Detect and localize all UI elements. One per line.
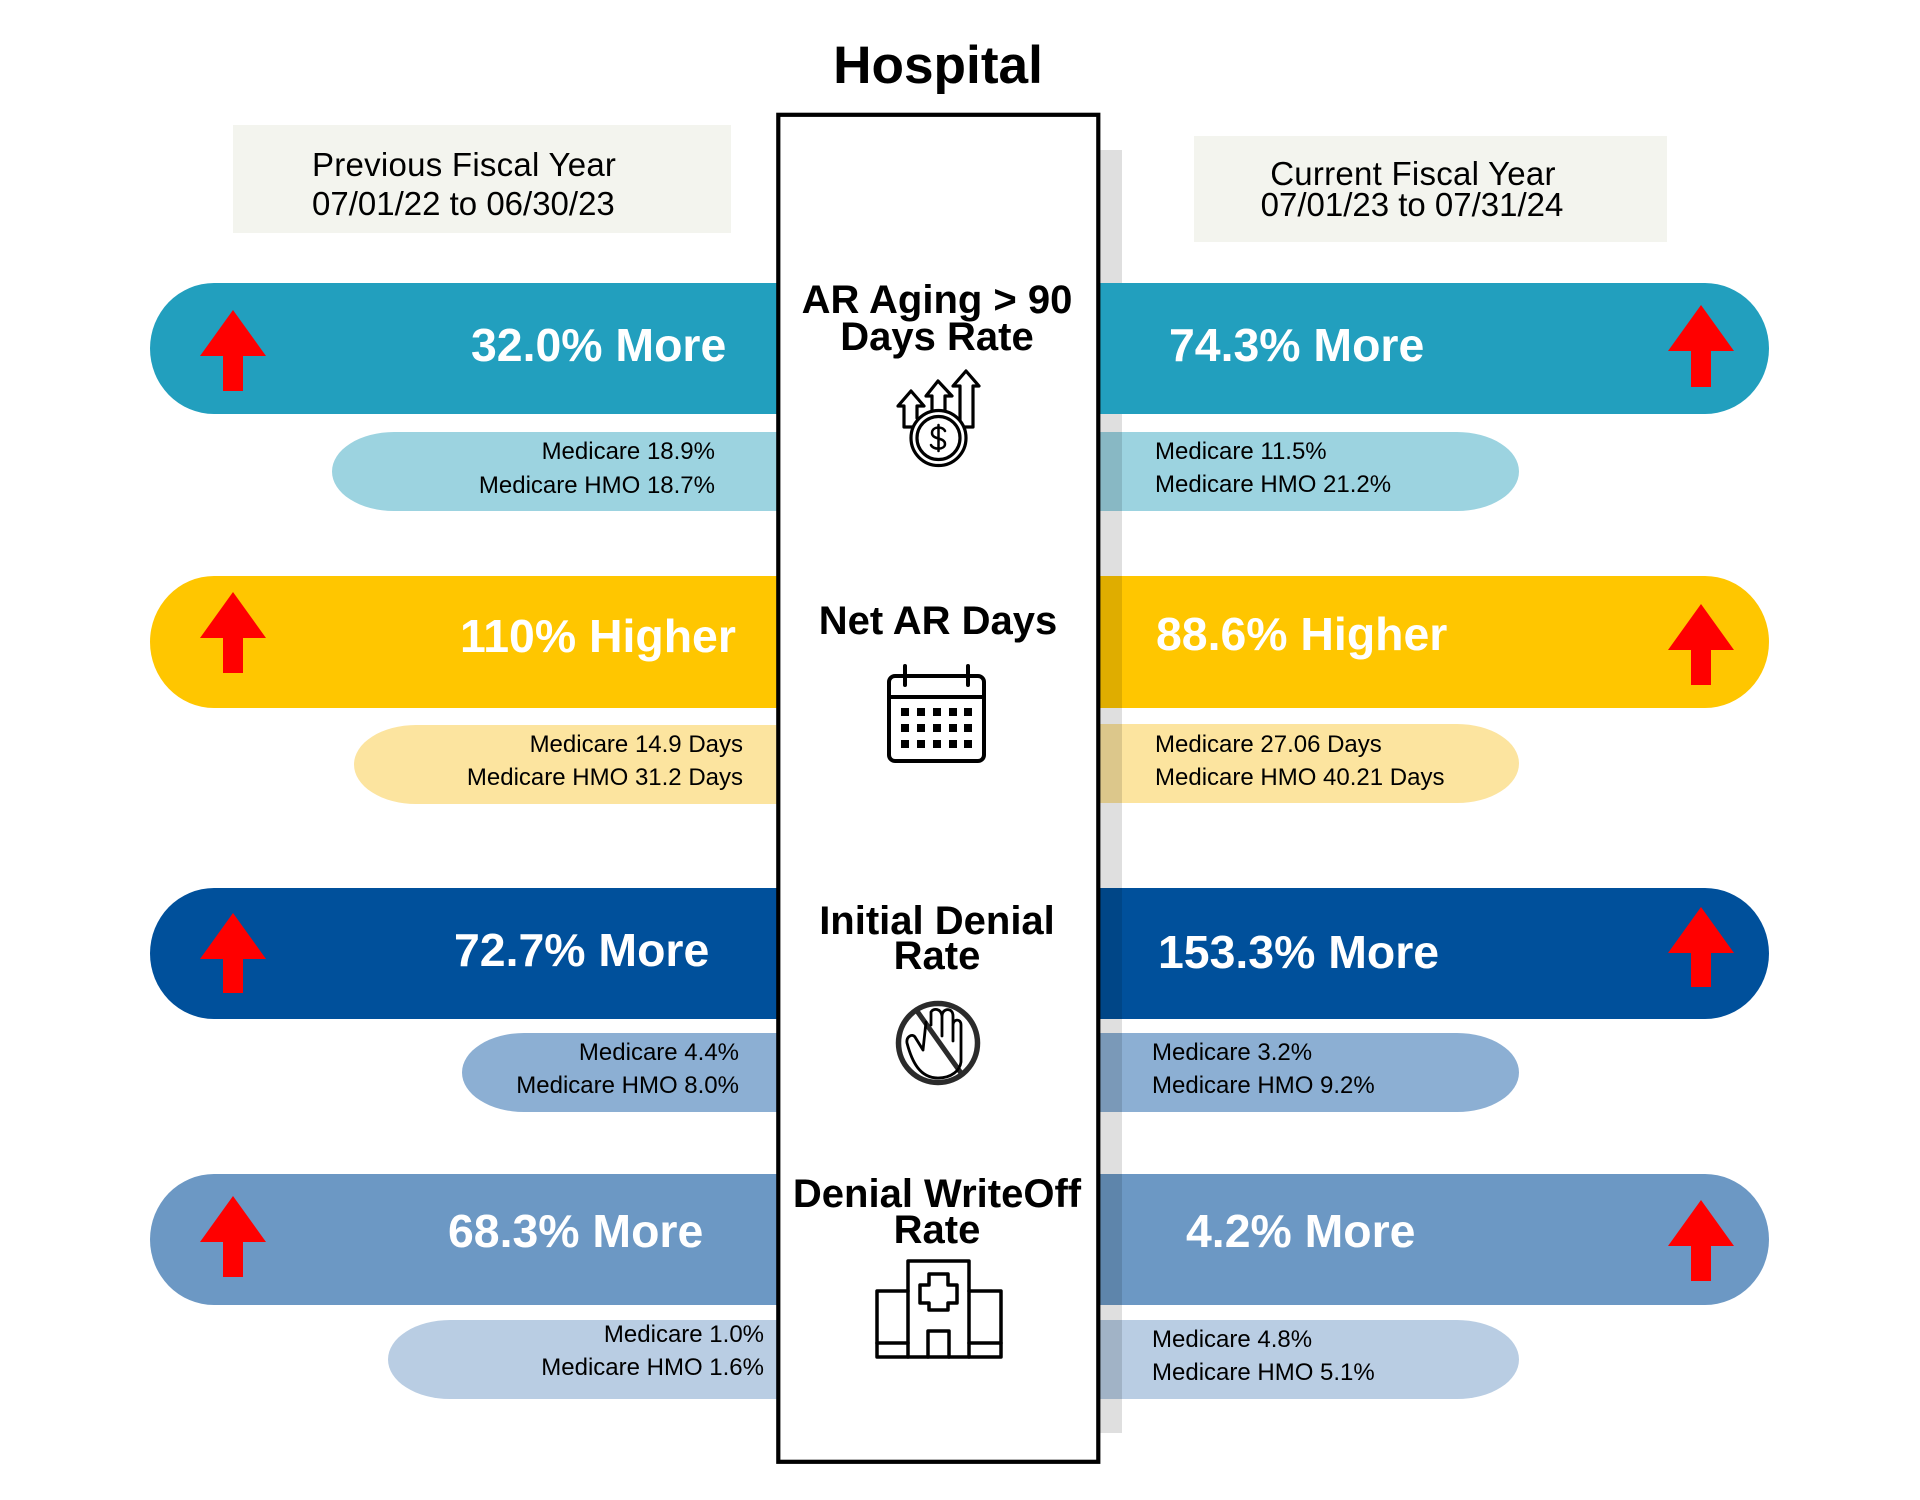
row 4 current: details: Medicare HMO 5.1% — [1152, 1359, 1375, 1386]
panel: current fiscal year header: 07/01/23 to 07/31/24 — [1261, 186, 1563, 223]
panel: current fiscal year header: Current Fiscal Year — [1270, 155, 1556, 192]
panel: AR aging current year sub bar — [1090, 432, 1519, 511]
heading: denial write-off — [793, 1172, 1082, 1252]
row 3 current: details — [1152, 1039, 1375, 1099]
row 3 current: details: Medicare 3.2% — [1152, 1039, 1312, 1066]
heading: AR aging: Days Rate — [840, 315, 1034, 359]
row 2 current: value: 88.6% Higher — [1156, 608, 1447, 660]
row 3 previous: value: 72.7% More — [454, 924, 709, 976]
panel: net AR days current year bar — [1090, 576, 1769, 803]
row 4 previous: details: Medicare 1.0% — [604, 1321, 764, 1348]
icon: hospital building — [877, 1261, 1001, 1357]
title: Hospital — [833, 36, 1043, 95]
row 4 previous: details: Medicare HMO 1.6% — [541, 1354, 764, 1381]
panel: denial write-off current year bar — [1090, 1174, 1769, 1399]
row 2 previous: details — [467, 731, 743, 791]
panel: denial write-off previous year bar — [150, 1174, 790, 1399]
row 4 current: details: Medicare 4.8% — [1152, 1326, 1312, 1353]
arrow: row 1 previous — [200, 310, 266, 391]
arrow: row 3 previous — [200, 913, 266, 993]
row 2 current: details: Medicare 27.06 Days — [1155, 731, 1382, 758]
row 1 current: details: Medicare 11.5% — [1155, 438, 1327, 465]
panel: net AR days previous year bar — [150, 576, 790, 804]
row 2 previous: value: 110% Higher — [460, 610, 736, 662]
panel: previous fiscal year header: Previous Fiscal Year — [312, 146, 616, 183]
row 1 current: details — [1155, 438, 1391, 498]
heading: denial write-off: Rate — [894, 1208, 980, 1252]
row 2 previous: details: Medicare 14.9 Days — [530, 731, 743, 758]
arrow: row 2 current — [1668, 604, 1734, 685]
row 1 previous: value: 32.0% More — [471, 319, 726, 371]
heading: initial denial: Initial Denial — [819, 899, 1055, 943]
row 1 current: details: Medicare HMO 21.2% — [1155, 471, 1391, 498]
row 4 previous: details — [541, 1321, 764, 1381]
panel: AR aging current year bar — [1090, 283, 1769, 414]
heading: denial write-off: Denial WriteOff — [793, 1172, 1082, 1216]
row 1 previous: details: Medicare HMO 18.7% — [479, 472, 715, 499]
panel: previous fiscal year header — [233, 125, 731, 233]
row 3 previous: details: Medicare 4.4% — [579, 1039, 739, 1066]
icon: calendar — [889, 666, 984, 761]
row 1 previous: details — [479, 438, 715, 499]
center panel shadow — [1090, 150, 1122, 1433]
arrow: row 1 current — [1668, 305, 1734, 387]
heading: initial denial: Rate — [894, 934, 980, 978]
arrow: row 4 current — [1668, 1200, 1734, 1281]
row 3 previous: details: Medicare HMO 8.0% — [516, 1072, 739, 1099]
arrow: row 3 current — [1668, 907, 1734, 987]
heading: net AR days: Net AR Days — [819, 599, 1057, 643]
panel: initial denial previous year bar — [150, 888, 790, 1112]
row 4 current: value: 4.2% More — [1186, 1205, 1415, 1257]
heading: AR aging: AR Aging > 90 — [802, 278, 1072, 322]
row 3 previous: details — [516, 1039, 739, 1099]
panel: initial denial current year bar — [1090, 888, 1769, 1112]
arrow: row 4 previous — [200, 1196, 266, 1277]
row 3 current: value: 153.3% More — [1158, 926, 1439, 978]
row 4 current: details — [1152, 1326, 1375, 1386]
heading: initial denial — [819, 899, 1055, 978]
row 2 current: details — [1155, 731, 1444, 791]
row 1 current: value: 74.3% More — [1169, 319, 1424, 371]
heading: AR aging — [802, 278, 1072, 359]
panel: center column — [778, 115, 1098, 1462]
row 2 current: details: Medicare HMO 40.21 Days — [1155, 764, 1444, 791]
row 4 previous: value: 68.3% More — [448, 1205, 703, 1257]
icon: stop hand — [898, 1004, 978, 1082]
panel: previous fiscal year header: 07/01/22 to 06/30/23 — [312, 185, 615, 222]
panel: current fiscal year header — [1194, 136, 1667, 242]
panel: AR aging previous year bar — [150, 283, 790, 511]
arrow: row 2 previous — [200, 592, 266, 673]
row 2 previous: details: Medicare HMO 31.2 Days — [467, 764, 743, 791]
row 3 current: details: Medicare HMO 9.2% — [1152, 1072, 1375, 1099]
icon: rising arrows with dollar coin — [898, 371, 979, 466]
row 1 previous: details: Medicare 18.9% — [542, 438, 715, 465]
